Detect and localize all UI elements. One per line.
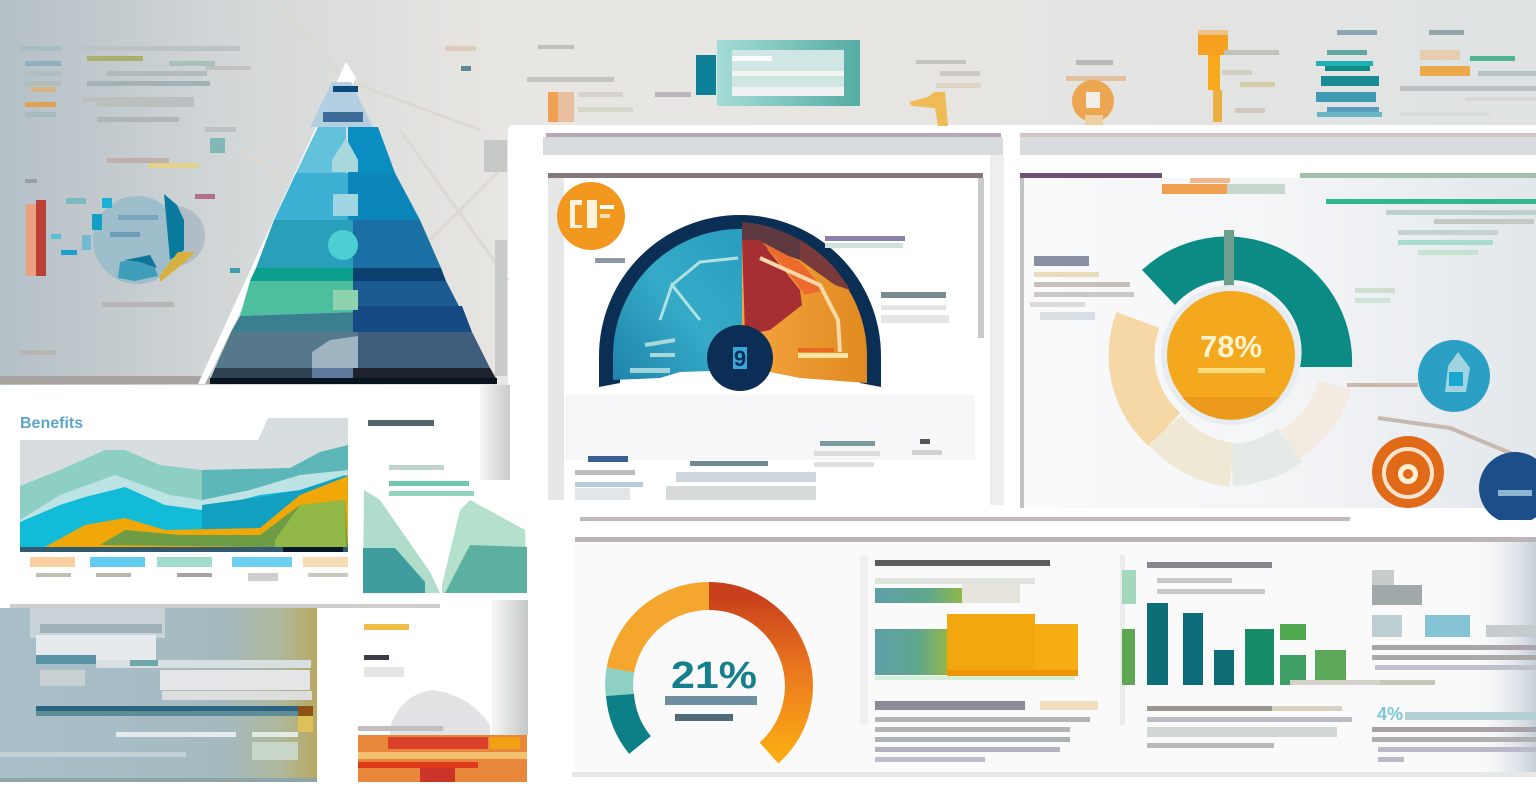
- panel: right donut: [1020, 125, 1536, 524]
- divider strip under pyramid panel: [0, 376, 210, 384]
- text block 2: [1147, 706, 1352, 748]
- panel: area chart: [0, 385, 510, 600]
- pyramid chart: [198, 62, 497, 384]
- panel: flame band: [358, 624, 527, 782]
- donut chart: [1132, 230, 1352, 465]
- panel: centre gauge: [510, 125, 1020, 520]
- icon: teal stacked list: [1316, 30, 1382, 117]
- icon: orange ring: [1066, 76, 1126, 125]
- connector line: [1347, 385, 1515, 455]
- icon: globe chart: [20, 194, 240, 355]
- icon: orange pin: [1198, 30, 1228, 122]
- divider: [10, 604, 440, 608]
- side shading column: [480, 385, 528, 735]
- gauge labels: [575, 236, 949, 500]
- text block 3: 4%: [1377, 704, 1403, 724]
- text block 3: [1372, 704, 1536, 762]
- icon: left gauge bar: [25, 179, 46, 276]
- panel: bottom dashboard: [530, 517, 1536, 778]
- donut value: 78%: [1200, 329, 1262, 364]
- top row: small text and icons: [527, 30, 1536, 126]
- panel title: [40, 624, 162, 633]
- ring value: 21%: [671, 655, 757, 697]
- icon: open book panel: [363, 420, 527, 593]
- icon: orange badge: [557, 182, 625, 250]
- pyramid icons: [328, 138, 358, 310]
- top-left text lines: [20, 46, 476, 168]
- icon: navy circle: [1479, 452, 1536, 524]
- gauge chart: 9: [734, 346, 746, 371]
- text block 1: [875, 701, 1098, 762]
- icon: amber label: [1400, 30, 1536, 116]
- panel: bottom-left block: [0, 608, 317, 782]
- top row: teal card icon: [696, 40, 860, 106]
- orange bar chart: [875, 560, 1078, 680]
- green bar chart: [1122, 562, 1410, 685]
- small green marker: [174, 394, 193, 404]
- callout: top orange label: [1162, 178, 1285, 194]
- ring chart: [619, 596, 799, 753]
- panel heading: Benefits: [20, 415, 83, 432]
- side stats: [1372, 570, 1536, 685]
- icon: orange target: [1372, 436, 1444, 508]
- gauge chart: [599, 215, 881, 391]
- icon: blue circle: [1418, 340, 1490, 412]
